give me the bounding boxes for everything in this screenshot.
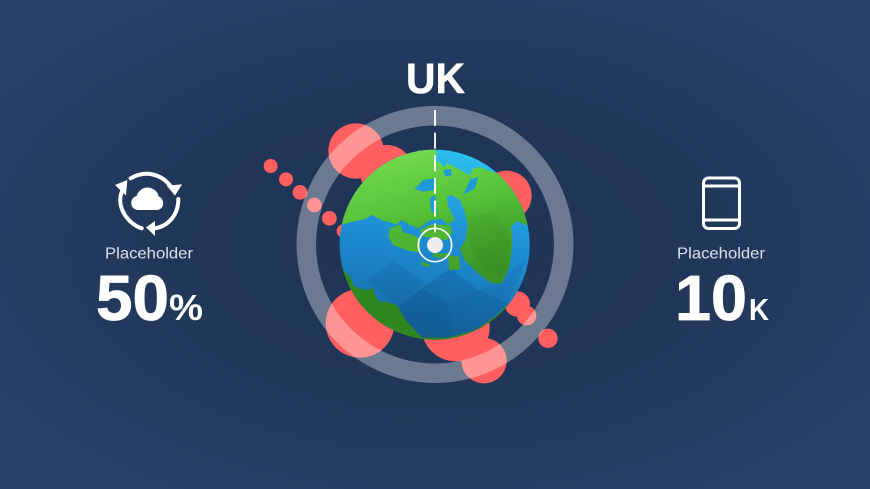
unit: % <box>169 287 203 328</box>
right stat <box>675 178 770 334</box>
unit: K <box>749 292 770 327</box>
label: Placeholder <box>677 246 766 262</box>
bay <box>376 296 384 304</box>
central land <box>388 224 420 252</box>
value: 50 <box>96 262 169 334</box>
left stat <box>96 174 203 334</box>
land facets <box>468 212 512 278</box>
inland seas <box>414 169 478 213</box>
icon: tablet <box>704 178 740 228</box>
icon: cloud with circular arrows <box>115 174 182 236</box>
north land mass <box>342 150 528 284</box>
dashed pin line <box>432 110 438 232</box>
ocean facets <box>368 258 527 342</box>
ocean <box>335 145 535 345</box>
location marker <box>418 228 452 262</box>
label: Placeholder <box>105 246 194 262</box>
value: 10 <box>675 262 747 334</box>
red location bubbles <box>264 123 558 383</box>
progress ring <box>306 116 564 373</box>
title: UK <box>406 55 465 103</box>
globe <box>340 110 530 340</box>
globe graphic <box>264 110 564 383</box>
south land <box>341 262 508 340</box>
